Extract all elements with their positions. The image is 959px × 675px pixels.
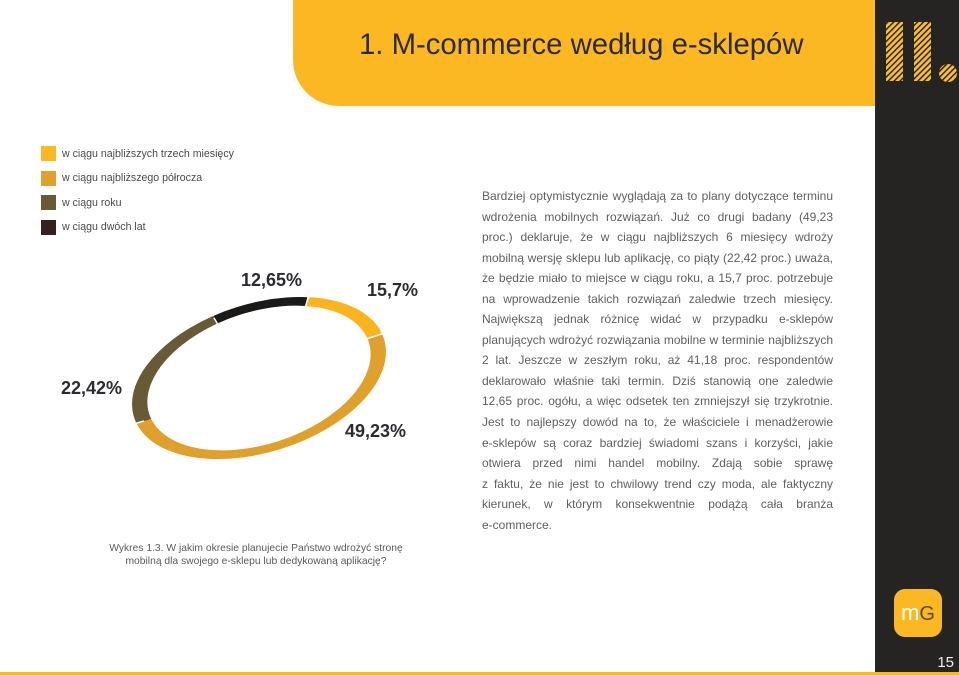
body text: z faktu, że nie jest to chwilowy trend czy moda, ale faktyczny [482,477,833,491]
value label: 15,7%: 15,7% [367,280,418,300]
legend label: two years: w ciągu dwóch lat [62,221,146,233]
body text: proc.) deklaruje, że w ciągu najbliższych 6 miesięcy wdroży [482,230,833,244]
legend label: half year: w ciągu najbliższego półrocza [62,172,202,184]
body text: na wprowadzenie takich rozwiązań zaledwie trzech miesięcy. [482,292,833,306]
value label: 22,42%: 22,42% [61,378,122,398]
ring chart [132,297,386,459]
icon: mG logo [894,589,942,637]
chart caption: mobilną dla swojego e-sklepu lub dedykowaną aplikację? [125,556,387,567]
body text: Największą jednak różnicę widać w przypadku e-sklepów [482,312,833,326]
body text: że będzie miało to miejsce w ciągu roku, a 15,7 proc. potrzebuje [482,271,833,285]
value label: 12,65%: 12,65% [241,270,302,290]
body text: kierunek, w którym konsekwentnie podążą cała branża [482,497,833,511]
body text: 12,65 proc. ogółu, a więc odsetek ten zmniejszył się trzykrotnie. [482,394,833,408]
body text: e-sklepów są coraz bardziej świadomi szans i korzyści, jakie [482,436,833,450]
page number: 15 [937,654,954,671]
body text [482,189,834,532]
body text: Bardziej optymistycznie wyglądają za to plany dotyczące terminu [482,189,833,203]
body text: 2 lat. Jeszcze w zeszłym roku, aż 41,18 proc. respondentów [482,353,833,367]
title: 1. M-commerce według e-sklepów [359,28,804,61]
legend [41,146,234,235]
legend swatch: half year [41,171,56,186]
value label: 49,23%: 49,23% [345,421,406,441]
legend swatch: three months [41,146,56,161]
body text: wdrożenia mobilnych rozwiązań. Już co drugi badany (49,23 [482,210,833,224]
body text: mobilną wersję sklepu lub aplikację, co piąty (22,42 proc.) uważa, [482,251,833,265]
chart caption [109,543,403,567]
legend label: three months: w ciągu najbliższych trzech miesięcy [62,148,234,160]
body text: otwiera przed nimi handel mobilny. Zdają sobie sprawę [482,456,833,470]
legend swatch: two years [41,220,56,235]
header band [293,0,875,106]
chart caption: Wykres 1.3. W jakim okresie planujecie Państwo wdrożyć stronę [109,543,403,554]
body text: deklarowało właśnie taki termin. Dziś stanowią one zaledwie [482,374,833,388]
body text: Jest to najlepszy dowód na to, że właściciele i menadżerowie [482,415,833,429]
body text: planujących wdrożyć rozwiązania mobilne w terminie najbliższych [482,333,833,347]
sidebar [875,0,959,675]
legend label: year: w ciągu roku [62,197,121,209]
legend swatch: year [41,195,56,210]
icon: mG logo: mG [901,600,935,625]
bottom line [0,672,959,675]
body text: e-commerce. [482,518,552,532]
icon: chapter number II. [886,22,957,82]
